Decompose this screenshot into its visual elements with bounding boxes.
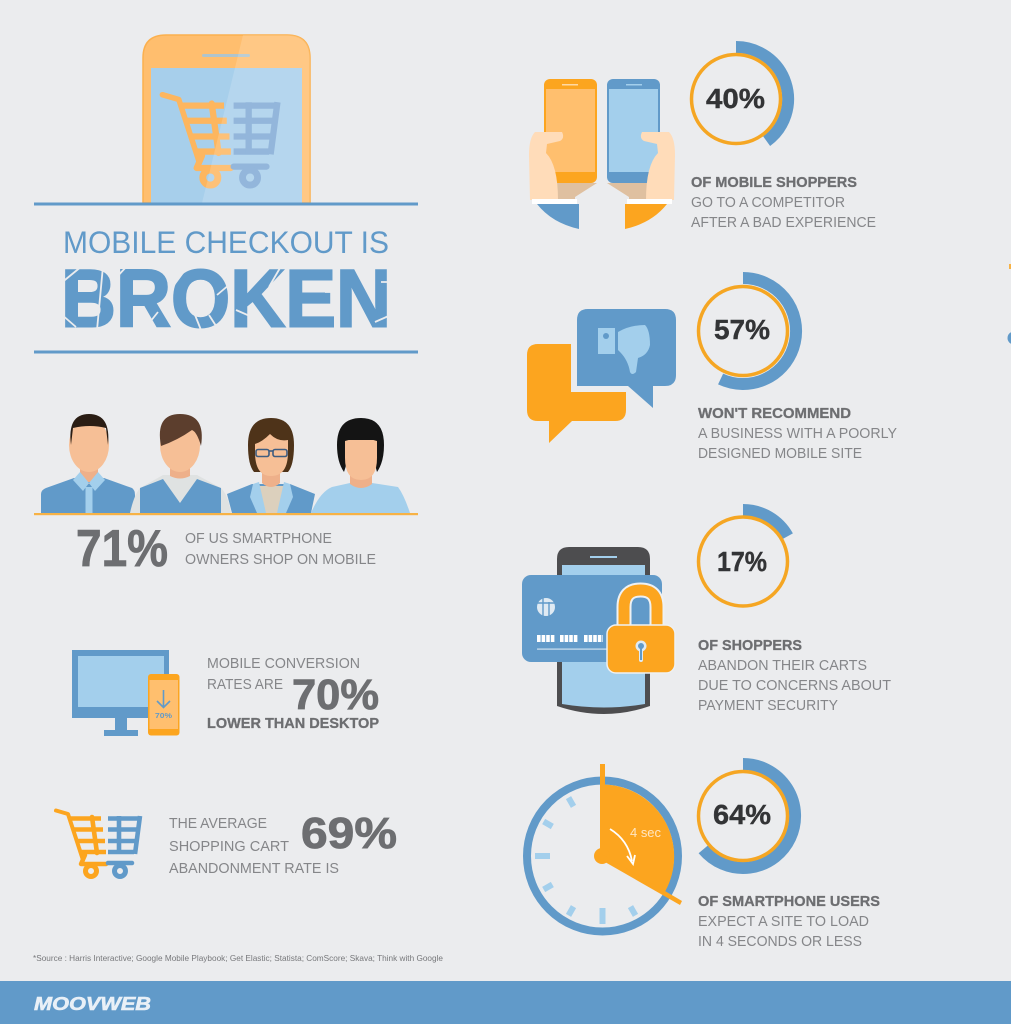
text: 64 percent caption: IN 4 SECONDS OR LESS	[698, 933, 862, 950]
text: cart abandonment	[169, 809, 397, 877]
icon: split shopping cart	[56, 810, 141, 876]
text: mobile conversion rates: MOBILE CONVERSION	[207, 655, 360, 672]
text: cart abandonment: ABANDONMENT RATE IS	[169, 860, 339, 877]
donut chart: 17 percent	[698, 510, 788, 606]
text: 17 percent caption: DUE TO CONCERNS ABOUT	[698, 677, 891, 694]
donut chart: 40 percent	[692, 47, 788, 144]
text: 64 percent caption	[698, 893, 880, 950]
text: 17 percent caption: PAYMENT SECURITY	[698, 697, 838, 714]
text: smartphone owners	[185, 530, 376, 568]
text: 64 percent caption: EXPECT A SITE TO LOAD	[698, 913, 869, 930]
text: mobile conversion rates: RATES ARE	[207, 676, 283, 693]
text: 17 percent caption: ABANDON THEIR CARTS	[698, 657, 867, 674]
donut chart: 57 percent: 57%	[714, 314, 770, 345]
icon: clock with four second wedge	[527, 764, 682, 932]
person: man with vest	[130, 414, 231, 513]
text: mobile conversion rates	[207, 655, 379, 732]
text: 40 percent caption: OF MOBILE SHOPPERS	[691, 174, 857, 191]
text: 40 percent caption: GO TO A COMPETITOR	[691, 194, 845, 211]
icon: speech bubbles with thumbs down	[527, 309, 676, 443]
donut chart: 40 percent: 40%	[706, 83, 765, 114]
text: mobile conversion rates: LOWER THAN DESKTOP	[207, 715, 379, 732]
icon: desktop monitor and phone: 70%	[155, 711, 172, 720]
person: woman with glasses	[227, 418, 315, 513]
heading: mobile checkout is: MOBILE CHECKOUT IS	[63, 224, 389, 260]
source note: *Source : Harris Interactive; Google Mobile Playbook; Get Elastic; Statista; ComScore; Skava; Think with Google	[33, 953, 443, 963]
text: 57 percent caption	[698, 405, 897, 462]
rule: top of title	[34, 202, 418, 206]
stat: 71 percent: 71%	[76, 520, 168, 578]
donut chart: 64 percent	[698, 764, 795, 868]
footer band	[0, 981, 1011, 1024]
text: 17 percent caption: OF SHOPPERS	[698, 637, 802, 654]
text: 57 percent caption: WON'T RECOMMEND	[698, 405, 851, 422]
logo: moovweb: MOOVWEB	[34, 993, 151, 1014]
text: 57 percent caption: A BUSINESS WITH A POORLY	[698, 425, 897, 442]
edge fragment: clipped marks at right	[1008, 264, 1011, 344]
rule: people baseline	[34, 513, 418, 515]
icon: hands holding two phones	[529, 79, 675, 229]
donut chart: 17 percent: 17%	[717, 546, 767, 577]
text: cart abandonment: 69%	[301, 809, 397, 858]
heading: broken: BROKEN	[61, 254, 391, 344]
icon: clock with four second wedge: 4 sec	[630, 825, 661, 840]
text: 40 percent caption	[691, 174, 876, 231]
text: 17 percent caption	[698, 637, 891, 714]
text: 64 percent caption: OF SMARTPHONE USERS	[698, 893, 880, 910]
donut chart: 57 percent	[698, 278, 796, 384]
rule: bottom of title	[34, 350, 418, 354]
illustration: four people	[41, 414, 410, 513]
text: mobile conversion rates: 70%	[292, 671, 379, 719]
text: cart abandonment: THE AVERAGE	[169, 815, 267, 832]
text: smartphone owners: OF US SMARTPHONE	[185, 530, 332, 547]
text: smartphone owners: OWNERS SHOP ON MOBILE	[185, 551, 376, 568]
donut chart: 64 percent: 64%	[713, 799, 771, 830]
text: 40 percent caption: AFTER A BAD EXPERIENCE	[691, 214, 876, 231]
text: 57 percent caption: DESIGNED MOBILE SITE	[698, 445, 862, 462]
icon: credit card, phone and padlock	[522, 547, 675, 714]
icon: hero phone with shopping cart	[143, 35, 310, 203]
person: woman with bob haircut	[311, 418, 410, 513]
icon: desktop monitor and phone	[72, 650, 180, 736]
text: cart abandonment: SHOPPING CART	[169, 838, 289, 855]
person: man with tie	[41, 414, 135, 513]
